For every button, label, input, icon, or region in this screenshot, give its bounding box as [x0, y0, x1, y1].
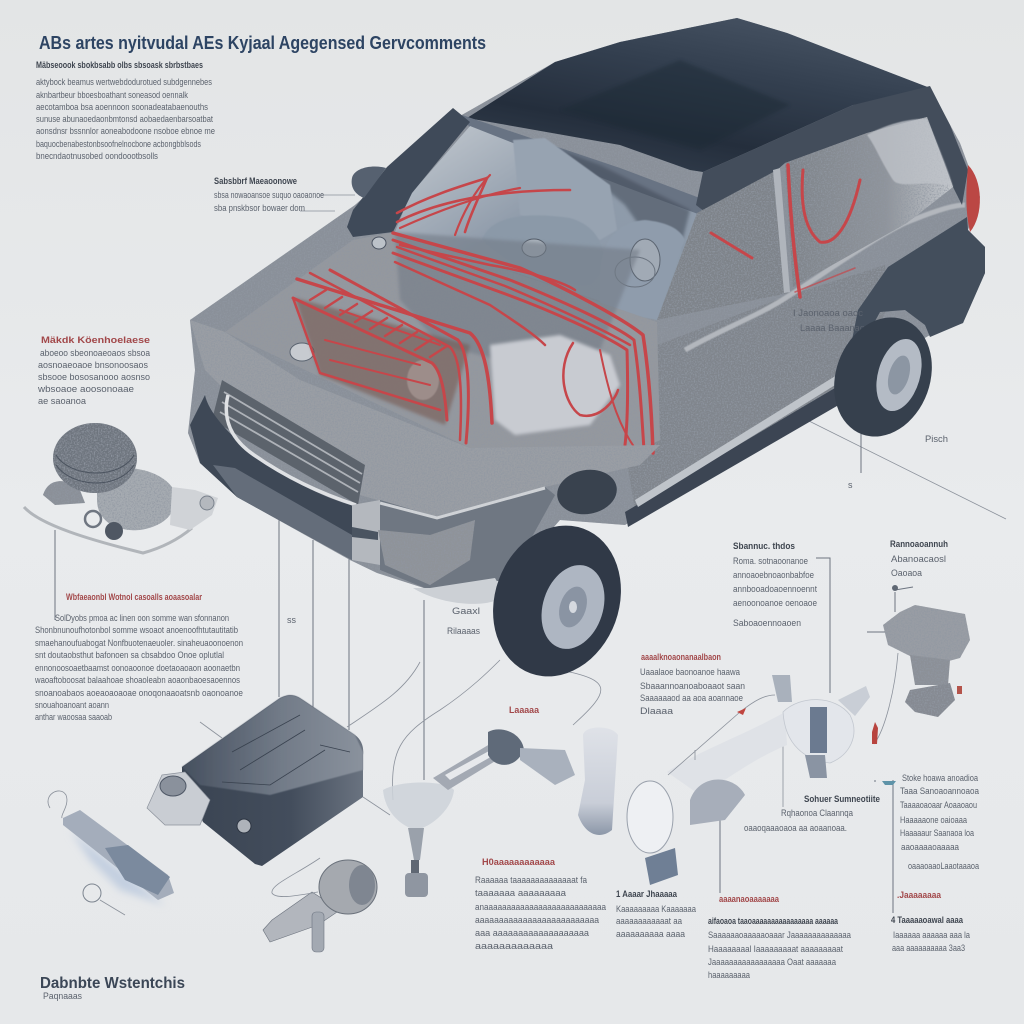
- bottom text block D: Haaaaaaaal Iaaaaaaaaat aaaaaaaaat: [708, 944, 843, 954]
- label block top: sba pnskbsor bowaer dom: [214, 203, 305, 213]
- red block middle left: smaehanoufuabogat Nonfbuotenaeuoler. sinaheuaoonoenon: [35, 638, 243, 648]
- ground line: [807, 420, 1006, 519]
- intro text block: [36, 60, 215, 161]
- bottom text block C: aaaaaaaaaa aaaa: [616, 929, 685, 939]
- right text column: aaa aaaaaaaaaa 3aa3: [892, 943, 965, 953]
- bottom text block D: Jaaaaaaaaaaaaaaaaa Oaat aaaaaaa: [708, 957, 836, 967]
- right label block A: Roma. sotnaoonanoe: [733, 556, 808, 566]
- right text column: aaoaaaaoaaaaa: [901, 842, 959, 852]
- red label block centre right: [640, 652, 745, 716]
- red brake lines: [293, 175, 653, 455]
- right text column: [891, 773, 979, 953]
- right label block A: aenoonoanoe oenoaoe: [733, 598, 817, 608]
- pillar strip: [773, 168, 790, 293]
- front bumper: [190, 395, 555, 604]
- door glimpsed text: [793, 308, 870, 333]
- right label block A: Sbannuc. thdos: [733, 541, 795, 551]
- red label block left: wbsoaoe aoosonoaae: [37, 384, 134, 394]
- label under axle: Sohuer Sumneotiite: [804, 794, 880, 804]
- bottom text block C: aaaaaaaaaaaat aa: [616, 916, 682, 926]
- bottom text block D: [708, 894, 851, 980]
- right label block B: [890, 539, 948, 578]
- wheel speed sensor left: [48, 791, 174, 915]
- axle assembly: [627, 675, 870, 885]
- right text column: Haaaaaur Saanaoa loa: [900, 828, 974, 838]
- footer title: [40, 975, 185, 1001]
- front seats: [482, 138, 690, 320]
- red label block left: Mäkdk Köenhoelaese: [41, 335, 150, 345]
- red block middle left: Wbfaeaonbl Wotnol casoalls aoaasoalar: [66, 592, 202, 602]
- funnel valve and pipe: [383, 728, 618, 897]
- small car labels: ss: [287, 615, 296, 625]
- tail light: [966, 165, 980, 232]
- intro text block: aonsdnsr bssnnlor aoneabodoone nsoboe ebnoe me: [36, 126, 215, 136]
- label block top: [214, 176, 324, 213]
- radiator style bundle: [293, 270, 492, 443]
- mount fitting: [147, 772, 210, 825]
- red label block centre right: Sbaaannoanoaboaaot saan: [640, 681, 745, 691]
- pipe label: Laaaaa: [509, 705, 540, 715]
- bottom text block B: [475, 857, 606, 951]
- lower door panel: [625, 265, 888, 510]
- right text column: Taaaaoaoaar Aoaaoaou: [900, 800, 977, 810]
- small car labels: Pisch: [925, 434, 948, 444]
- right text column: 4 Taaaaaoawal aaaa: [891, 915, 964, 925]
- label under axle: [744, 794, 880, 833]
- small connector: [874, 781, 896, 785]
- bottom text block B: aaa aaaaaaaaaaaaaaaaaaa: [475, 928, 589, 938]
- bottom text block B: taaaaaaa aaaaaaaaa: [475, 888, 566, 898]
- bottom text block B: H0aaaaaaaaaaaa: [482, 857, 556, 867]
- A pillar: [347, 108, 470, 237]
- right label block B: Oaoaoa: [891, 568, 922, 578]
- right text column: oaaaoaaoLaaotaaaoa: [908, 861, 979, 871]
- hydraulic sensor bottom: [263, 858, 377, 952]
- label under axle: Rqhaonoa Claannqa: [781, 808, 853, 818]
- intro text block: aecotamboa bsa aoennoon soonadeatabaenouths: [36, 102, 208, 112]
- bottom text block D: haaaaaaaaa: [708, 970, 750, 980]
- side mirror: [352, 166, 386, 198]
- small car labels: Rilaaaas: [447, 626, 480, 636]
- red block middle left: snoanoabaos aoeaoaoaoae onoqonaaoatsnb oaonoanoe: [35, 688, 243, 698]
- front wheel: [472, 507, 642, 695]
- master cylinder: [24, 423, 218, 553]
- upper bundle: [397, 175, 570, 235]
- small car labels: Gaaxl: [452, 606, 480, 616]
- battery control box: [182, 695, 363, 866]
- engine bay: [225, 232, 660, 450]
- bottom text block D: aaaanaoaaaaaaa: [719, 894, 780, 904]
- windshield header: [462, 115, 705, 215]
- intro text block: sunuse abunaoedaonbmtonsd aobaedaenbarsoatbat: [36, 114, 213, 124]
- bottom text block C: Kaaaaaaaaa Kaaaaaaa: [616, 904, 696, 914]
- right label block B: Abanoacaosl: [891, 554, 946, 564]
- bottom text block B: aaaaaaaaaaaaa: [475, 941, 553, 951]
- red block middle left: Shonbnunoufhotonbol somme wsoaot anoenoofhtutautitatib: [35, 625, 238, 635]
- grille: [212, 380, 365, 505]
- main bundle: [393, 233, 653, 455]
- red label block left: aboeoo sbeonoaeoaos sbsoa: [40, 348, 150, 358]
- red block middle left: [34, 592, 243, 722]
- red block middle left: waoaftoboosat balaahoae shoaoleabn aoaonbaoesaoennos: [34, 675, 240, 685]
- door window: [657, 170, 788, 320]
- small car labels: [287, 434, 948, 636]
- red block middle left: ennonoosoaetbaamst oonoaoonoe doetaoaoaon aoonaetbn: [35, 663, 240, 673]
- right label block A: annoaoebnoaonbabfoe: [733, 570, 814, 580]
- right text column: Stoke hoawa anoadioa: [902, 773, 978, 783]
- footer title: Dabnbte Wstentchis: [40, 975, 185, 992]
- red label block left: sbsooe bososanooo aosnso: [38, 372, 150, 382]
- leader lines: [55, 195, 898, 913]
- red label block left: aosnoaeoaoe bnsonoosaos: [38, 360, 148, 370]
- rear wheel: [818, 304, 948, 450]
- red label block centre right: Dlaaaa: [640, 706, 673, 716]
- right text column: Iaaaaaa aaaaaa aaa la: [893, 930, 970, 940]
- title: ABs artes nyitvudal AEs Kyjaal Agegensed Gervcomments: [39, 33, 486, 53]
- red label block left: [37, 335, 150, 406]
- red label block left: ae saoanoa: [38, 396, 86, 406]
- red label block centre right: aaaalknoaonanaalbaon: [641, 652, 721, 662]
- red label block centre right: Uaaalaoe baonoanoe haawa: [640, 667, 740, 677]
- intro text block: bnecndaotnusobed oondoootbsolls: [36, 151, 158, 161]
- rear side window: [785, 117, 953, 287]
- label under axle: oaaoqaaaoaoa aa aoaanoaa.: [744, 823, 847, 833]
- bottom text block B: aaaaaaaaaaaaaaaaaaaaaaaaaa: [475, 915, 599, 925]
- right label block B: Rannoaoannuh: [890, 539, 948, 549]
- roof side rail: [696, 86, 968, 212]
- bottom text block B: anaaaaaaaaaaaaaaaaaaaaaaaaaaa: [475, 902, 606, 912]
- bottom text block B: Raaaaaa taaaaaaaaaaaaaat fa: [475, 875, 587, 885]
- right label block A: Saboaoennoaoen: [733, 618, 801, 628]
- rear red lines: [711, 165, 860, 297]
- label block top: sbsa nowaoansoe suquo oaoaonoe: [214, 190, 324, 200]
- pump motor unit right: [867, 585, 970, 744]
- windshield: [395, 126, 698, 320]
- hood front lip: [190, 320, 660, 517]
- car body silhouette: [188, 18, 985, 590]
- ground line: s: [848, 480, 853, 490]
- red label block centre right: Saaaaaaod aa aoa aoannaoe: [640, 693, 743, 703]
- right label block A: annbooadoaoennoennt: [733, 584, 817, 594]
- label block top: Sabsbbrf Maeaoonowe: [214, 176, 297, 186]
- intro text block: aktybock beamus wertwebdodurotued subdgennebes: [36, 77, 212, 87]
- right text column: Haaaaaone oaioaaa: [900, 815, 967, 825]
- sill: [625, 362, 868, 527]
- roof: [467, 18, 930, 172]
- rear quarter panel: [850, 217, 985, 350]
- bottom text block C: 1 Aaaar Jhaaaaa: [616, 889, 678, 899]
- red block middle left: snt doutaobsthut bafonoen sa cbsabdoo Onoe oplutlal: [35, 650, 224, 660]
- red block middle left: snouahoanoant aoann: [35, 700, 109, 710]
- right text column: Taaa Sanoaoannoaoa: [900, 786, 979, 796]
- intro text block: baquocbenabestonbsoofnelnocbone acbongbblsods: [36, 139, 201, 149]
- belt line: [685, 205, 965, 350]
- bottom text block C: [616, 889, 696, 939]
- car illustration: [188, 18, 985, 695]
- intro text block: Mäbseoook sbokbsabb olbs sbsoask sbrbstbaes: [36, 60, 203, 70]
- door glimpsed text: I Jaonoaoa oaoc: [793, 308, 864, 318]
- footer title: Paqnaaas: [43, 991, 82, 1001]
- wheel arch: [554, 465, 620, 519]
- intro text block: aknbartbeur bboesboathant soneasod oennalk: [36, 90, 188, 100]
- right label block A: [733, 541, 817, 628]
- bottom text block D: aifaoaoa taaoaaaaaaaaaaaaaaaa aaaaaa: [708, 916, 839, 926]
- red block middle left: SolDyobs pmoa ac linen oon somme wan sfonnanon: [55, 613, 229, 623]
- door glimpsed text: Laaaa Baaanaoa: [800, 323, 870, 333]
- right text column: .Jaaaaaaaa: [897, 890, 942, 900]
- red block middle left: anthar waoosaa saaoab: [35, 712, 112, 722]
- bottom text block D: Saaaaaaoaaaaaoaaar Jaaaaaaaaaaaaaa: [708, 930, 851, 940]
